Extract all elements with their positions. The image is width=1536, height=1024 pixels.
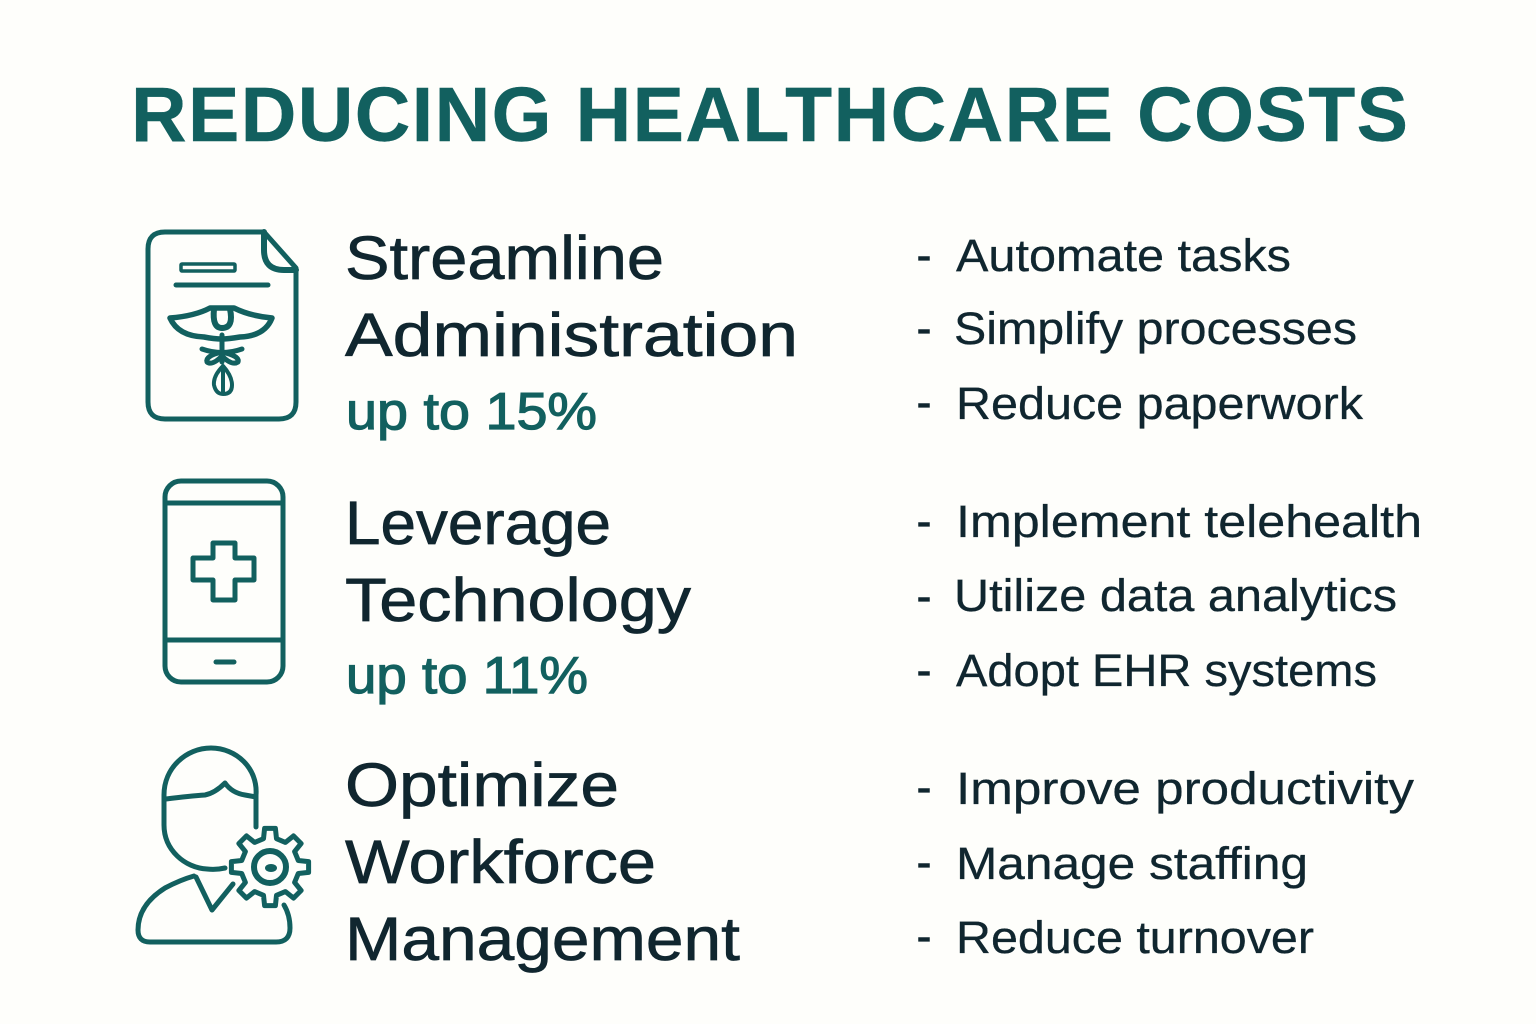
heading: streamline administration: Streamline [345,224,664,292]
panel: optimize workforce management [138,748,1415,973]
list: workforce actions: Improve productivity [956,763,1415,814]
list: technology actions: - [917,575,931,619]
icon: smartphone with medical cross [165,481,283,682]
list: administration actions: - [917,234,931,278]
list: technology actions: Implement telehealth [956,496,1422,547]
list: workforce actions [917,763,1415,963]
list: workforce actions: - [917,915,931,959]
list: workforce actions: Reduce turnover [956,912,1314,963]
heading: optimize workforce management: Workforce [345,828,656,896]
panel: leverage technology [165,481,1422,705]
list: technology actions: Adopt EHR systems [956,645,1377,696]
list: administration actions: - [917,381,931,425]
icon: medical document [148,232,296,419]
panel: streamline administration [148,224,1364,441]
heading: streamline administration [345,224,798,369]
savings: up to 11%: up to 11% [346,647,588,705]
list: technology actions: - [917,649,931,693]
list: technology actions: Utilize data analytics [954,570,1397,621]
heading: streamline administration: Administration [345,301,798,369]
list: administration actions: Automate tasks [956,230,1291,281]
heading: leverage technology [345,489,692,634]
list: technology actions [917,496,1422,696]
heading: optimize workforce management: Management [345,905,740,973]
heading: optimize workforce management: Optimize [345,751,619,819]
heading: leverage technology: Technology [345,566,692,634]
list: workforce actions: - [917,766,931,810]
list: administration actions [917,230,1364,429]
list: administration actions: Reduce paperwork [956,378,1364,429]
list: administration actions: - [917,307,931,351]
list: administration actions: Simplify processes [954,303,1357,354]
savings: up to 15%: up to 15% [346,383,597,441]
list: workforce actions: - [917,841,931,885]
heading: leverage technology: Leverage [345,489,611,557]
heading: optimize workforce management [345,751,740,973]
list: workforce actions: Manage staffing [956,838,1308,889]
list: technology actions: - [917,500,931,544]
title: REDUCING HEALTHCARE COSTS [131,72,1408,158]
icon: person with gear [138,748,309,942]
